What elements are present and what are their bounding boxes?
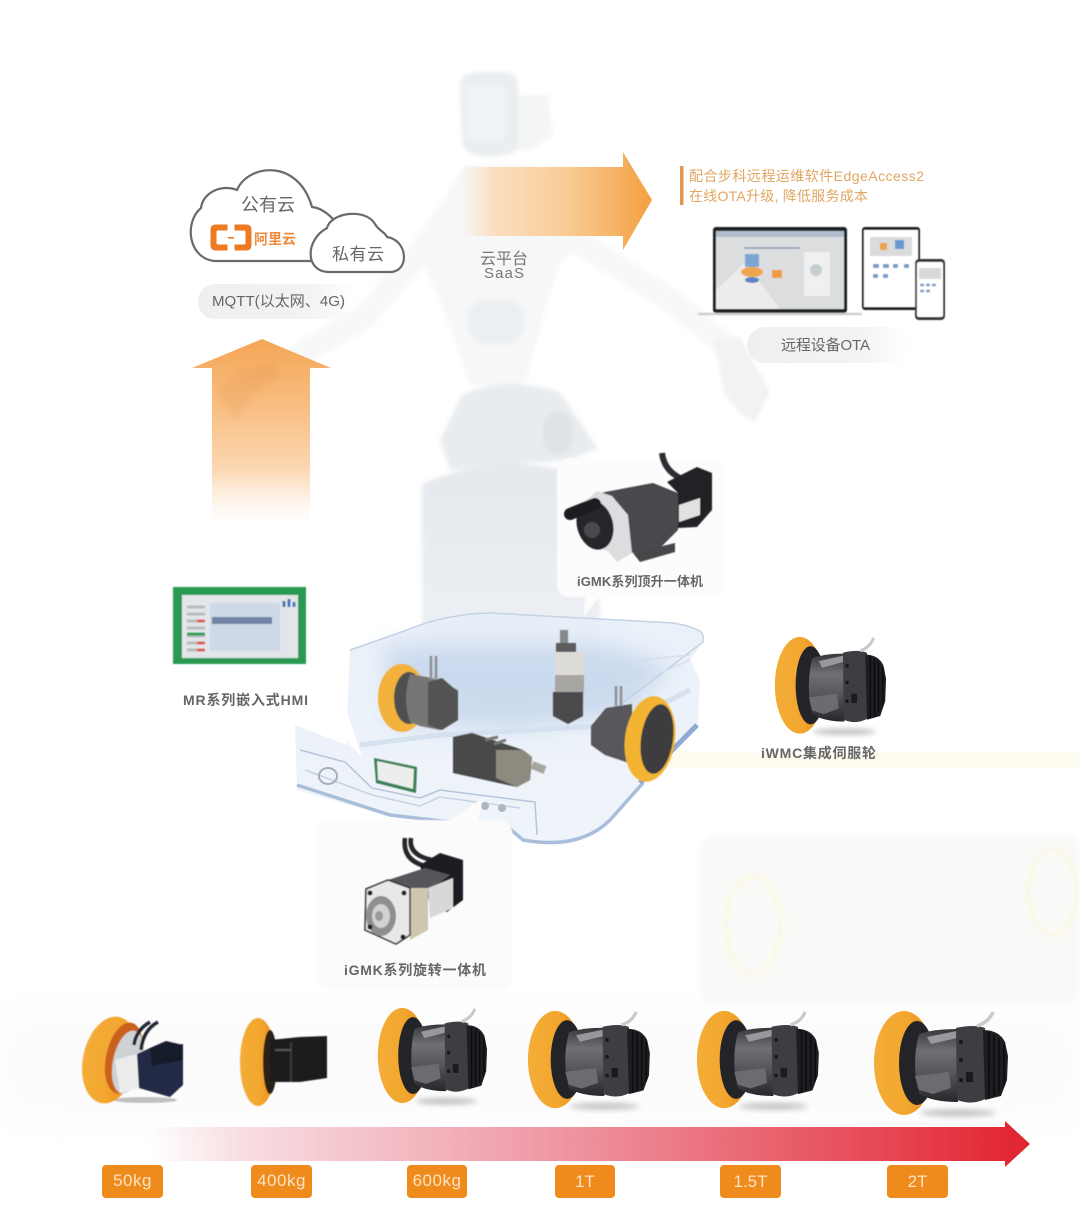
arrow: right orange [462,152,652,250]
upper shell outline [350,613,703,712]
load tag: 2T [887,1165,948,1198]
iWMC servo wheel [775,637,886,735]
robot torso [415,165,590,385]
arrow: load capacity [148,1121,1030,1167]
load tag: 600kg [407,1165,467,1198]
robot hand over arrow [217,362,282,420]
arrow: upward orange [192,339,331,525]
wheel: 2T [874,1011,1008,1116]
private cloud label: 私有云 [332,245,384,264]
robot pedestal [422,464,600,690]
HMI label: MR系列嵌入式HMI [183,692,308,708]
MQTT pill: MQTT(以太网、4G) [212,293,345,310]
load tag: 2T: 2T [908,1172,927,1191]
SaaS label: SaaS [484,265,524,282]
SaaS label [480,250,528,282]
load tag: 1T [555,1165,615,1198]
AGV mini HMI [374,758,417,793]
devices: laptop tablet phone [698,227,945,320]
callout panel: lift motor [557,453,725,616]
load tag: 600kg: 600kg [413,1171,461,1190]
robot right hand [714,337,770,422]
EdgeAccess callout text: 在线OTA升级, 降低服务成本 [689,188,868,204]
load tag: 50kg [102,1165,163,1198]
AGV drive motor [453,733,545,787]
aliyun logo [211,225,296,250]
load tag: 1.5T [720,1165,781,1198]
wheel: 600kg [378,1008,487,1104]
logo mark [319,768,337,784]
robot head [460,72,518,157]
robot ghost [270,72,770,690]
AGV translucent chassis [295,613,703,845]
robot waist [440,384,598,470]
EdgeAccess callout text: 配合步科远程运维软件EdgeAccess2 [689,168,924,184]
rotary motor [365,838,463,944]
phone [915,259,945,320]
load tag: 400kg: 400kg [257,1171,306,1190]
laptop [698,227,862,314]
load tag: 1.5T: 1.5T [733,1172,768,1191]
wheel: 1T [528,1011,650,1110]
rotary motor label: iGMK系列旋转一体机 [344,962,486,978]
wheel: 50kg [74,1011,183,1109]
MQTT pill [198,284,358,319]
SaaS label: 云平台 [480,250,528,268]
public cloud [191,170,338,261]
iWMC label: iWMC集成伺服轮 [761,745,876,761]
tablet [862,227,920,310]
HMI display [173,587,306,664]
base front trim [300,750,537,835]
wheel: 400kg [240,1018,327,1106]
OTA pill [747,327,912,363]
lift motor label: iGMK系列顶升一体机 [577,574,703,589]
private cloud [311,214,404,272]
robot arms [270,240,430,372]
truck ghost in background [660,752,1080,1005]
callout panel: rotary motor [315,798,513,990]
load tag: 1T: 1T [575,1172,595,1191]
wheel: 1.5T [697,1011,819,1110]
AGV wheel right [591,686,681,785]
EdgeAccess callout text [680,166,924,205]
AGV lift motor [553,630,584,724]
public cloud label: 公有云 [241,195,295,215]
load tag: 50kg: 50kg [113,1171,152,1190]
lift motor [570,453,712,562]
aliyun logo: 阿里云 [254,231,296,247]
callout pointer: HMI [328,695,362,757]
AGV wheel left [378,656,458,732]
blue lower edge [297,783,643,842]
load tag: 400kg [251,1165,312,1198]
silhouette [295,613,703,845]
interior shading [385,645,670,730]
OTA pill: 远程设备OTA [781,337,870,354]
clouds [191,170,404,272]
floor lip [360,690,690,745]
